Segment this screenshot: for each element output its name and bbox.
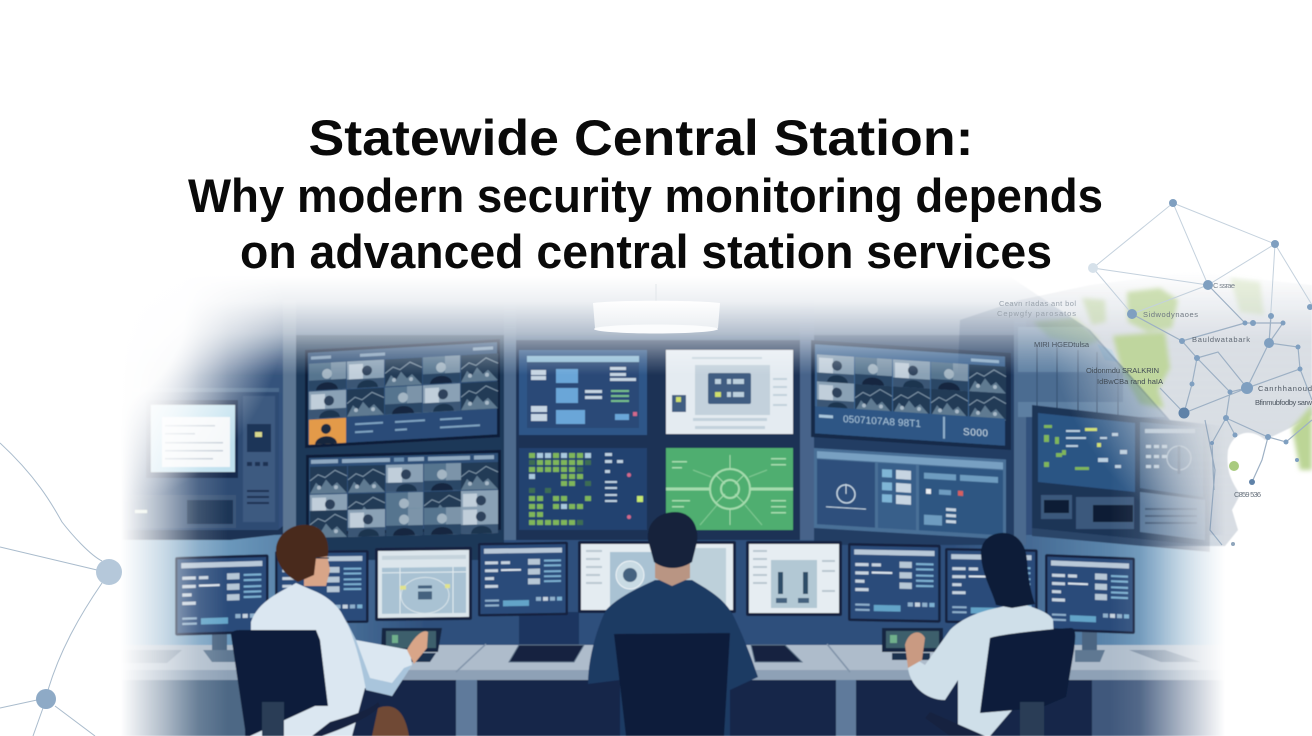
title line 2: Why modern security monitoring depends	[188, 169, 1103, 222]
wall screen: camera feeds right	[811, 340, 1011, 450]
neck	[655, 560, 690, 586]
backing block	[519, 612, 579, 646]
chair	[614, 633, 730, 736]
screen digits: 0507107A8 98T1	[843, 414, 921, 430]
hair	[648, 512, 697, 568]
hair	[276, 525, 328, 582]
centre screen: status grid	[519, 448, 647, 530]
hair	[981, 533, 1035, 608]
monitor 6: light	[746, 541, 842, 616]
water inlet	[1097, 344, 1118, 362]
monitor 4	[478, 542, 568, 616]
monitor stands	[203, 630, 1105, 662]
monitor 1	[175, 554, 269, 636]
desk accessories	[110, 628, 1201, 663]
lower units	[180, 495, 236, 528]
face	[304, 555, 330, 586]
map labels: C859 536	[1234, 490, 1261, 499]
glasses	[316, 557, 329, 559]
hand	[905, 632, 925, 668]
console screen	[146, 400, 238, 478]
wall columns	[282, 329, 1026, 560]
map labels: MIRI HGEDtulsa	[1034, 340, 1090, 349]
tablet: right	[751, 645, 802, 662]
map labels: Cepwgfy parosatos	[997, 309, 1076, 318]
map labels: Canrhhanoud	[1258, 384, 1312, 393]
node: small	[36, 689, 56, 709]
sleeve shade	[342, 612, 412, 696]
map labels: Oidonmdu SRALKRIN	[1086, 366, 1159, 375]
map labels	[997, 281, 1312, 499]
touch controller: left	[381, 628, 442, 662]
map labels: C ssrae	[1213, 281, 1235, 290]
monitor 9	[1045, 554, 1135, 634]
console ledge	[110, 526, 283, 540]
operator: left	[231, 525, 428, 736]
screen counter: S000	[963, 427, 988, 440]
side panel	[243, 396, 275, 522]
monitor 3: light	[375, 547, 472, 621]
lower units	[1041, 495, 1072, 519]
node: large	[96, 559, 122, 585]
centre screen: green radar	[666, 448, 793, 530]
desk	[60, 612, 1260, 736]
chair	[980, 628, 1075, 713]
screen: radar	[1140, 422, 1196, 495]
tablet: left	[509, 645, 584, 662]
monitor 2	[275, 550, 369, 624]
chair	[231, 630, 328, 736]
map labels: Sidwodynaoes	[1143, 310, 1198, 319]
title line 1: Statewide Central Station:	[308, 110, 974, 166]
wall screen: dashboard right	[814, 448, 1006, 540]
ledge	[1032, 528, 1210, 552]
map labels: IdBwCBa rand haIA	[1097, 377, 1163, 386]
trousers	[372, 706, 409, 736]
map labels: Bfinmubfodby sarw	[1255, 398, 1312, 407]
centre screen: light panel	[666, 350, 793, 434]
back wall	[124, 288, 1220, 536]
ceiling lamp	[593, 284, 720, 334]
centre screen: dashboard	[519, 350, 647, 435]
translucent map wall panel	[1018, 327, 1165, 417]
chair arm	[312, 702, 380, 736]
title	[188, 110, 1103, 278]
keyboard: far right	[1129, 650, 1201, 662]
under-desk area	[244, 679, 1093, 736]
operator: centre	[588, 512, 758, 736]
wall screen: camera feeds lower	[306, 450, 501, 538]
coat	[250, 583, 412, 736]
land mass	[950, 272, 1312, 546]
map with network	[950, 199, 1312, 546]
keyboard: far left	[110, 650, 182, 663]
desk monitor row	[175, 541, 1135, 636]
monitor 5: light	[578, 541, 736, 613]
desktop	[130, 644, 1215, 670]
green regions	[1033, 278, 1312, 470]
left console	[110, 388, 283, 540]
monitor 7	[848, 543, 941, 623]
left network decoration	[0, 443, 122, 736]
map labels: Ceavn rIadas ant bol	[999, 299, 1076, 308]
monitor 8	[945, 548, 1038, 624]
screen: status	[1038, 413, 1135, 492]
network edges	[1093, 203, 1312, 545]
network nodes	[1088, 199, 1312, 546]
green islet	[1229, 461, 1239, 471]
desk legs	[456, 680, 477, 736]
coat	[908, 603, 1055, 736]
control room illustration	[124, 288, 1220, 736]
suit	[588, 580, 758, 736]
housing	[1032, 405, 1210, 548]
hand	[407, 631, 428, 664]
title line 3: on advanced central station services	[240, 225, 1052, 278]
touch controller: right	[882, 628, 943, 660]
right console	[1032, 405, 1210, 552]
operator: right	[905, 533, 1075, 736]
console housing	[212, 393, 278, 529]
chair base	[1020, 702, 1044, 736]
map labels: Bauldwatabark	[1192, 335, 1250, 344]
wall screen: camera feeds upper	[305, 339, 500, 448]
lower wall band	[128, 534, 1218, 646]
